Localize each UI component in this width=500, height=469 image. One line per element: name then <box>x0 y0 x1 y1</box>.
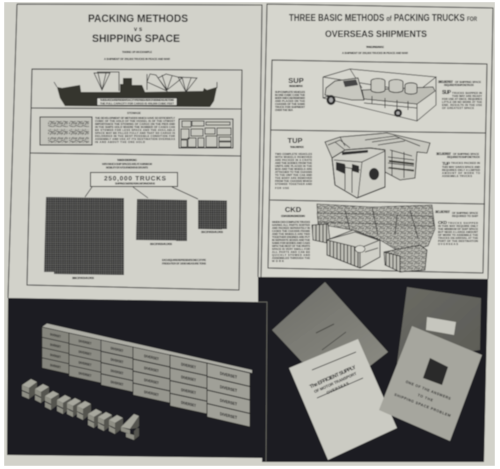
illustration: TUP twin pack crate <box>325 133 430 198</box>
text: CKD right note: BUT NEED A LARGE AMOUNT <box>438 230 478 234</box>
text: TUP right note: AMOUNT OF WORK TO <box>442 171 480 175</box>
callout: 250,000 trucks: SHIPPING OVERSEAS IN UNIT 3/4 MONTHS <box>115 182 155 186</box>
title: three basic methods of packing trucks for overseas shipments: A SHIPMENT OF 250,000 TRUCKS IN PEACE AND WAR <box>342 51 408 55</box>
illustration: cargo ship with loading cranes: THIS SHADOW REPRESENTS A C.3 TYPE FREIGHTER OF 9000 MEASURE TONS <box>100 98 174 102</box>
text: TUP description: AND THE BODIES FROM THE <box>275 161 312 165</box>
icon: packed crates panel left <box>40 117 92 145</box>
text: grid note: FREIGHTER OF 10000 MEASURE TONS <box>162 262 206 266</box>
text: stowage paragraph: BE STOWED FOR LESS SPACE AND THE AVAILABLE <box>95 128 175 132</box>
booklet: one of the answers to the shipping space problem <box>379 326 482 441</box>
text: stowage paragraph: IN THE SHIPS HOLD WHERE THE NUMBER OF CASES CAN <box>95 125 175 129</box>
wall of large crates: DIVERSET <box>111 357 123 364</box>
section: TUP <box>275 133 480 198</box>
text: CKD description: CASES THE CHASSIS FRAME <box>272 229 310 233</box>
wall of large crates: DIVERSET <box>181 362 197 370</box>
text: SUP description: IN ONE CUBIC CASE THE <box>275 93 305 97</box>
wall of large crates: DIVERSET <box>79 360 91 367</box>
wall of large crates: DIVERSET <box>144 354 160 362</box>
wall of large crates: DIVERSET <box>144 366 160 374</box>
text: TUP description: BOX AND THE WHEELS ARE <box>275 167 312 171</box>
section: SUP: SINGLE UNIT PACK <box>289 84 303 88</box>
text: TUP right note: 110 CUBIC FEET <box>436 152 452 156</box>
booklet: one of the answers to the shipping space problem: SHIPPING SPACE PROBLEM <box>394 393 451 418</box>
text: CKD description: WORK <box>272 259 284 263</box>
text: CKD description: WITH THE REST OF THE PARTS <box>272 244 310 248</box>
illustration: cargo ship with loading cranes: THE FULL CAPACITY FOR CARGO IS 450,000 CUBIC FEET <box>100 102 174 106</box>
wall of large crates: DIVERSET <box>181 375 197 383</box>
text: stowage paragraph: IMPORTANCE THE STOWING OF CARGO ON THE PIER AND <box>95 122 175 126</box>
text: CKD description: WHEN CKD COMPLETE TRUCKS <box>272 220 310 224</box>
wall of large crates: DIVERSET <box>220 370 238 380</box>
wall of large crates: DIVERSET <box>50 352 61 359</box>
text: TUP description: TO THE UNIT THE CAB AND <box>275 173 312 177</box>
text: stowage paragraph: SPACE MAY BE FILLED FULLY AND THAT SO CARGO IS <box>95 131 175 135</box>
text: CKD description: AND PACKED SEPARATELY IN <box>272 226 310 230</box>
text: SUP right note: TRUCKS SHIPPED IN <box>452 91 482 95</box>
text: TUP description: WITH WHEELS REMOVED <box>275 155 312 159</box>
text: CKD description: AND THE WHEELS ARE TIED <box>272 232 310 236</box>
text: CKD right note: OF SHIPPING SPACE <box>452 211 478 215</box>
text: TUP description: STOWED TOGETHER AND <box>275 182 312 186</box>
illustration: CKD crates and parts <box>312 204 435 272</box>
booklet: efficient supply of motor transport overseas <box>289 339 397 460</box>
text: method of packing intro: THE METHODS OF PACKING <box>117 158 137 162</box>
text: TUP description <box>275 152 312 190</box>
wall of large crates: DIVERSET <box>181 400 197 408</box>
wall of large crates <box>42 324 252 427</box>
section: SUP <box>275 69 482 121</box>
text: TUP right note: OF SHIPPING SPACE <box>453 152 479 156</box>
text: TUP right note: ASSEMBLE TRUCKS <box>442 174 472 178</box>
text: SUP description <box>275 90 305 112</box>
text: SUP right note: OF GREATEST SPACE <box>442 106 474 110</box>
text: stowage paragraph: IN AND ABOUT THE ONE HOLD <box>95 140 145 144</box>
title: packing methods vs shipping space: v s <box>134 27 143 33</box>
text: TUP description: THE BODY ARE REMOVED <box>275 176 312 180</box>
booklet: efficient supply of motor transport overseas: OF MOTOR TRANSPORT <box>313 371 358 394</box>
text: CKD right note: 33 CUBIC FEET <box>435 210 451 214</box>
text: TUP right note: THIS WAY SAVES SPACE AND <box>442 165 480 169</box>
text: CKD right note: OVERSEAS <box>438 242 458 246</box>
text: CKD description: SAME FOR BODIES AND CABS <box>272 241 310 245</box>
photo: booklets on dark background <box>258 277 488 462</box>
text: SUP right note: 390 CUBIC FEET <box>438 80 453 84</box>
text: SUP right note <box>438 80 482 110</box>
text: TUP right note: REQUIRES ONLY A LIMITED <box>442 168 480 172</box>
text: CKD right note: PORT OF THE DESTINATION <box>438 239 478 243</box>
title: packing methods vs shipping space <box>88 13 188 61</box>
text: TUP right note: REQUIRED TO SHIP ONE TRUCK <box>447 155 480 159</box>
wall of large crates: DIVERSET <box>50 342 61 349</box>
text: TUP description: UNITS ARE PLACED IN THE <box>275 164 312 168</box>
wall of large crates: DIVERSET <box>79 349 91 357</box>
illustration: SUP truck in crate <box>323 69 436 121</box>
text: SUP right note: OF SHIPPING SPACE <box>455 80 481 84</box>
text: SUP description: AND PLACED ON THE <box>275 99 305 103</box>
text: TUP description: FROM THE CHASSIS WHICH <box>275 179 312 183</box>
text: stowage paragraph: ASSEMBLY AND USE AT ITS DESTINATION OVERSEAS <box>95 137 175 141</box>
chart: CKD ship grid <box>198 200 227 234</box>
photo: crates stacked on dark background <box>7 298 267 458</box>
callout: 250,000 trucks: 250,000 TRUCKS <box>104 176 167 182</box>
text: SUP description: TRUCK FOR SHIPMENT <box>275 105 305 109</box>
text: TUP description: TWO COMPLETE VEHICLES <box>275 152 312 156</box>
text: CKD right note: REQUIRED TO SHIP <box>452 214 478 218</box>
title: three basic methods of packing trucks for overseas shipments: THREE BASIC METHODS of PACKING TRUCKS FOR <box>289 13 478 24</box>
text: TUP description: FOR USE <box>275 186 289 190</box>
text: method of packing intro: WITH WHICH SHIP SPACES ARE AT A MINIMUM <box>102 162 153 166</box>
title: packing methods vs shipping space: PACKING METHODS <box>88 13 188 25</box>
wall of large crates: DIVERSET <box>50 363 61 370</box>
booklet: efficient supply of motor transport overseas: OVERSEAS <box>326 381 350 395</box>
text: grid note: EACH SQUARE REPRESENTS ONE C.3 TYPE <box>162 258 206 262</box>
text: grid note <box>162 258 206 266</box>
callout: 250,000 trucks <box>90 172 178 186</box>
chart: CKD ship grid: 300 - C.3 TYPE SHIPLOADS <box>201 230 223 234</box>
text: CKD description: SPACE IS VERY SMALL FOR <box>272 247 310 251</box>
wall of large crates: DIVERSET <box>220 411 238 420</box>
text: SUP description: CHASSIS OF THE SAME <box>275 102 305 106</box>
text: stowage paragraph: CUBIC OF THE HOLD OF THE VESSEL IS OF THE UTMOST <box>95 119 175 123</box>
wall of large crates: DIVERSET <box>220 384 238 393</box>
text: SUP right note: LITTLE OR NO WORK AT THE <box>442 100 482 104</box>
text: CKD description: ASSEMBLED THROUGH THE <box>272 256 310 260</box>
booklet: dark cover with label <box>397 287 481 363</box>
booklet: one of the answers to the shipping space problem: ONE OF THE ANSWERS <box>405 380 452 401</box>
section: CKD <box>272 204 478 272</box>
title: packing methods vs shipping space: TAKING UP AN EXAMPLE <box>122 50 152 54</box>
wall of large crates: DIVERSET <box>144 390 160 398</box>
text: CKD description: IN SEPARATE BOXES AND THE <box>272 238 310 242</box>
text: stowage paragraph <box>95 116 175 144</box>
section: stowage comparison: STOWAGE <box>127 111 141 115</box>
text: TUP right note: TRUCKS PACKED IN <box>451 161 480 165</box>
text: CKD right note: TRUCKS SHIPPED <box>448 221 478 225</box>
text: SUP description: SUP COMPLETE VEHICLES <box>275 90 305 94</box>
text: method of packing intro: MOBILITY OF A FOUR MONTHS OR UNITS <box>106 166 148 170</box>
text: CKD right note: TRUCKS ON ARRIVAL AT THE <box>438 236 478 240</box>
booklet: grey spiral bound <box>272 282 388 366</box>
text: SUP right note: THIS WAY ARE READY <box>452 94 482 98</box>
text: SUP description: BODY AND CAB REMOVED <box>275 96 305 100</box>
wall of large crates: DIVERSET <box>79 371 91 378</box>
section: TUP: TUP <box>288 136 302 145</box>
section: TUP: TWIN UNIT PACK <box>290 145 304 149</box>
text: SUP right note: END. RESULTS IN THE USE <box>442 103 482 107</box>
wall of large crates: DIVERSET <box>111 346 123 353</box>
wall of large crates: DIVERSET <box>220 397 238 407</box>
text: CKD right note: IN THIS WAY REQUIRE ONLY <box>438 224 478 228</box>
title: packing methods vs shipping space: A SHIPMENT OF 250,000 TRUCKS IN PEACE AND WAR <box>104 57 170 61</box>
text: CKD right note: CKD <box>438 220 448 225</box>
text: stowage paragraph: THE DEVELOPMENT OF METHODS WHICH HAVE SO EFFICIENTLY <box>95 116 175 120</box>
text: TUP right note: TUP <box>442 161 450 166</box>
chart: TUP ship grid: 800 - C.3 TYPE SHIPLOADS <box>150 242 172 246</box>
text: CKD description: QUICKLY STOWED AND <box>272 253 310 257</box>
wall of large crates: DIVERSET <box>79 339 91 346</box>
wall of large crates: DIVERSET <box>111 368 123 376</box>
text: SUP right note: SUP <box>442 90 452 96</box>
illustration: cargo ship with loading cranes <box>54 72 217 107</box>
title: packing methods vs shipping space: SHIPPING SPACE <box>92 33 180 45</box>
section: SUP: SUP <box>288 76 304 85</box>
booklet: one of the answers to the shipping space problem: TO THE <box>417 393 434 403</box>
wall of large crates: DIVERSET <box>111 380 123 387</box>
text: CKD description: ALL PARTS AND CAN BE <box>272 250 310 254</box>
title: three basic methods of packing trucks for overseas shipments: OVERSEAS SHIPMENTS <box>325 29 427 40</box>
text: stowage paragraph: DELIVERED IN THE BEST POSSIBLE CONDITION FOR <box>95 134 175 138</box>
text: CKD right note: THE MINIMUM OF SHIP SPACE <box>438 227 478 231</box>
panel: right poster three basic methods <box>260 3 494 279</box>
chart: TUP ship grid <box>136 199 187 246</box>
title: three basic methods of packing trucks for overseas shipments <box>289 13 478 55</box>
panel: left poster packing methods vs shipping space <box>6 3 262 302</box>
text: CKD description: HAVING ALL PARTS SORTED <box>272 223 310 227</box>
wall of large crates: DIVERSET <box>50 332 61 339</box>
text: SUP right note: REQUIRED TO SHIP ONE TRUCK <box>444 83 474 87</box>
booklet: efficient supply of motor transport overseas: The EFFICIENT SUPPLY <box>309 364 358 390</box>
text: TUP description: ARE PACKED IN A CRATE <box>275 158 312 162</box>
icon: stowage plan right <box>179 119 233 148</box>
title: three basic methods of packing trucks for overseas shipments: TAKING UP AN EXAMPLE <box>366 45 384 49</box>
wall of large crates: DIVERSET <box>144 378 160 386</box>
section: CKD: CKD <box>285 205 302 214</box>
text: method of packing intro <box>102 158 153 170</box>
booklet cover photo <box>423 358 448 385</box>
section: stowage comparison <box>40 111 233 148</box>
row of small crates <box>22 379 139 440</box>
text: CKD description <box>272 220 310 263</box>
section: CKD: COMPLETELY KNOCKED DOWN <box>281 214 305 218</box>
text: CKD right note: OF WORK TO ASSEMBLE THE <box>438 233 478 237</box>
wall of large crates: DIVERSET <box>181 388 197 396</box>
text: SUP right note: FOR USE AT ONCE. REQUIRES <box>442 97 482 101</box>
chart: SUP ship grid: 1800 - C.3 TYPE SHIPLOADS <box>72 276 94 280</box>
text: TUP description: ATTACHED TO THE CHASSIS <box>275 170 312 174</box>
text: SUP description: OVER THE SEA <box>275 108 293 112</box>
text: CKD description: TOGETHER ENGINES ARE PUT <box>272 235 310 239</box>
chart: SUP ship grid <box>44 197 124 280</box>
text: TUP right note <box>436 152 480 178</box>
text: CKD right note <box>435 210 478 246</box>
